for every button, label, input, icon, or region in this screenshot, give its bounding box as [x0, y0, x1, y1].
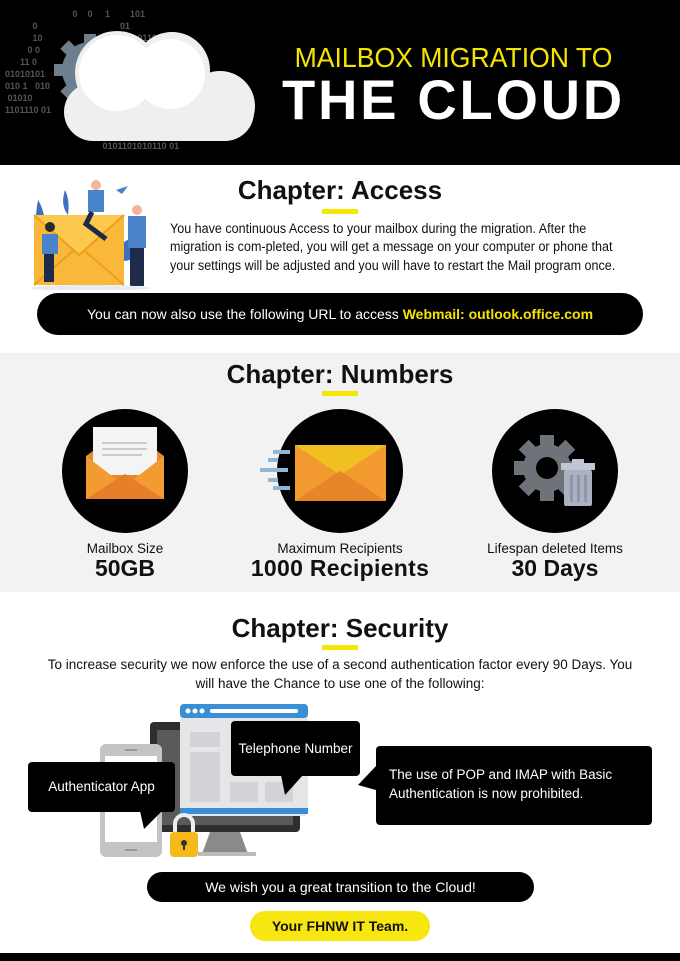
title: MAILBOX MIGRATION TO [295, 42, 612, 73]
callout: closing message [147, 872, 534, 902]
text: access description: your settings will be adjusted and you will have to restart the Mail program once. [170, 258, 615, 273]
callout: webmail url: You can now also use the following URL to access Webmail: outlook.office.com [87, 306, 593, 322]
badge: signature [250, 911, 430, 941]
callout: telephone number: Telephone Number [238, 741, 353, 756]
value: 50GB [95, 555, 155, 581]
binary digits background: 10 1 01101 [32, 33, 162, 43]
title: THE CLOUD [282, 68, 625, 131]
label: Maximum Recipients [277, 541, 403, 556]
header banner [0, 0, 680, 165]
binary digits background [5, 9, 190, 151]
icon: people with envelope [30, 180, 150, 290]
text: access description: migration is com-pleted, you will get a message on your computer or phone that [170, 239, 612, 254]
stat: lifespan deleted items [487, 409, 623, 581]
text: access description [170, 221, 615, 273]
callout: closing message: We wish you a great transition to the Cloud! [205, 879, 476, 895]
illustration: devices [100, 704, 308, 857]
heading: security: Chapter: Security [232, 613, 448, 643]
callout: authenticator app [28, 762, 175, 812]
heading: access: Chapter: Access [238, 175, 442, 205]
binary digits background: 01010101 1011 [5, 69, 190, 79]
text: security description: will have the Chance to use one of the following: [196, 676, 484, 691]
footer bar [0, 953, 680, 961]
binary digits background: 010 1 010 0 1 [5, 81, 183, 91]
binary digits background: 0 0 11 01 0 [28, 45, 155, 55]
binary digits background: 1101110 01 [5, 105, 51, 115]
callout: webmail url [37, 293, 643, 335]
value: 1000 Recipients [251, 555, 429, 581]
callout: pop imap prohibited [376, 746, 652, 825]
label: Mailbox Size [87, 541, 163, 556]
heading: numbers: Chapter: Numbers [227, 359, 453, 389]
panel: numbers [0, 353, 680, 592]
binary digits background: 0 0 1 101 [72, 9, 145, 19]
binary digits background: 0101101010110 01 [103, 141, 179, 151]
binary digits background: 0 01 [32, 21, 130, 31]
text: security description [48, 657, 632, 691]
badge: signature: Your FHNW IT Team. [272, 918, 408, 934]
panel: access [30, 175, 643, 335]
label: Lifespan deleted Items [487, 541, 623, 556]
stat: mailbox size [62, 409, 188, 581]
icon: cloud [64, 31, 255, 141]
callout: pop imap prohibited: The use of POP and IMAP with Basic [389, 767, 612, 782]
value: 30 Days [512, 555, 598, 581]
binary digits background: 11 0 010 11 [20, 57, 162, 67]
icon: open envelope [62, 409, 188, 533]
text: access description: You have continuous Access to your mailbox during the migration. After the [170, 221, 586, 236]
callout: authenticator app: Authenticator App [48, 779, 155, 794]
stat: max recipients [251, 409, 429, 581]
panel: security [28, 613, 652, 941]
icon: flying envelope [260, 409, 403, 533]
callout: pop imap prohibited: Authentication is now prohibited. [389, 786, 583, 801]
icon: gear and trash [492, 409, 618, 533]
text: security description: To increase security we now enforce the use of a second authentication factor every 90 Days. You [48, 657, 632, 672]
icon: gear [54, 34, 96, 98]
callout: telephone number [231, 721, 360, 776]
binary digits background: 01010 [8, 93, 33, 103]
